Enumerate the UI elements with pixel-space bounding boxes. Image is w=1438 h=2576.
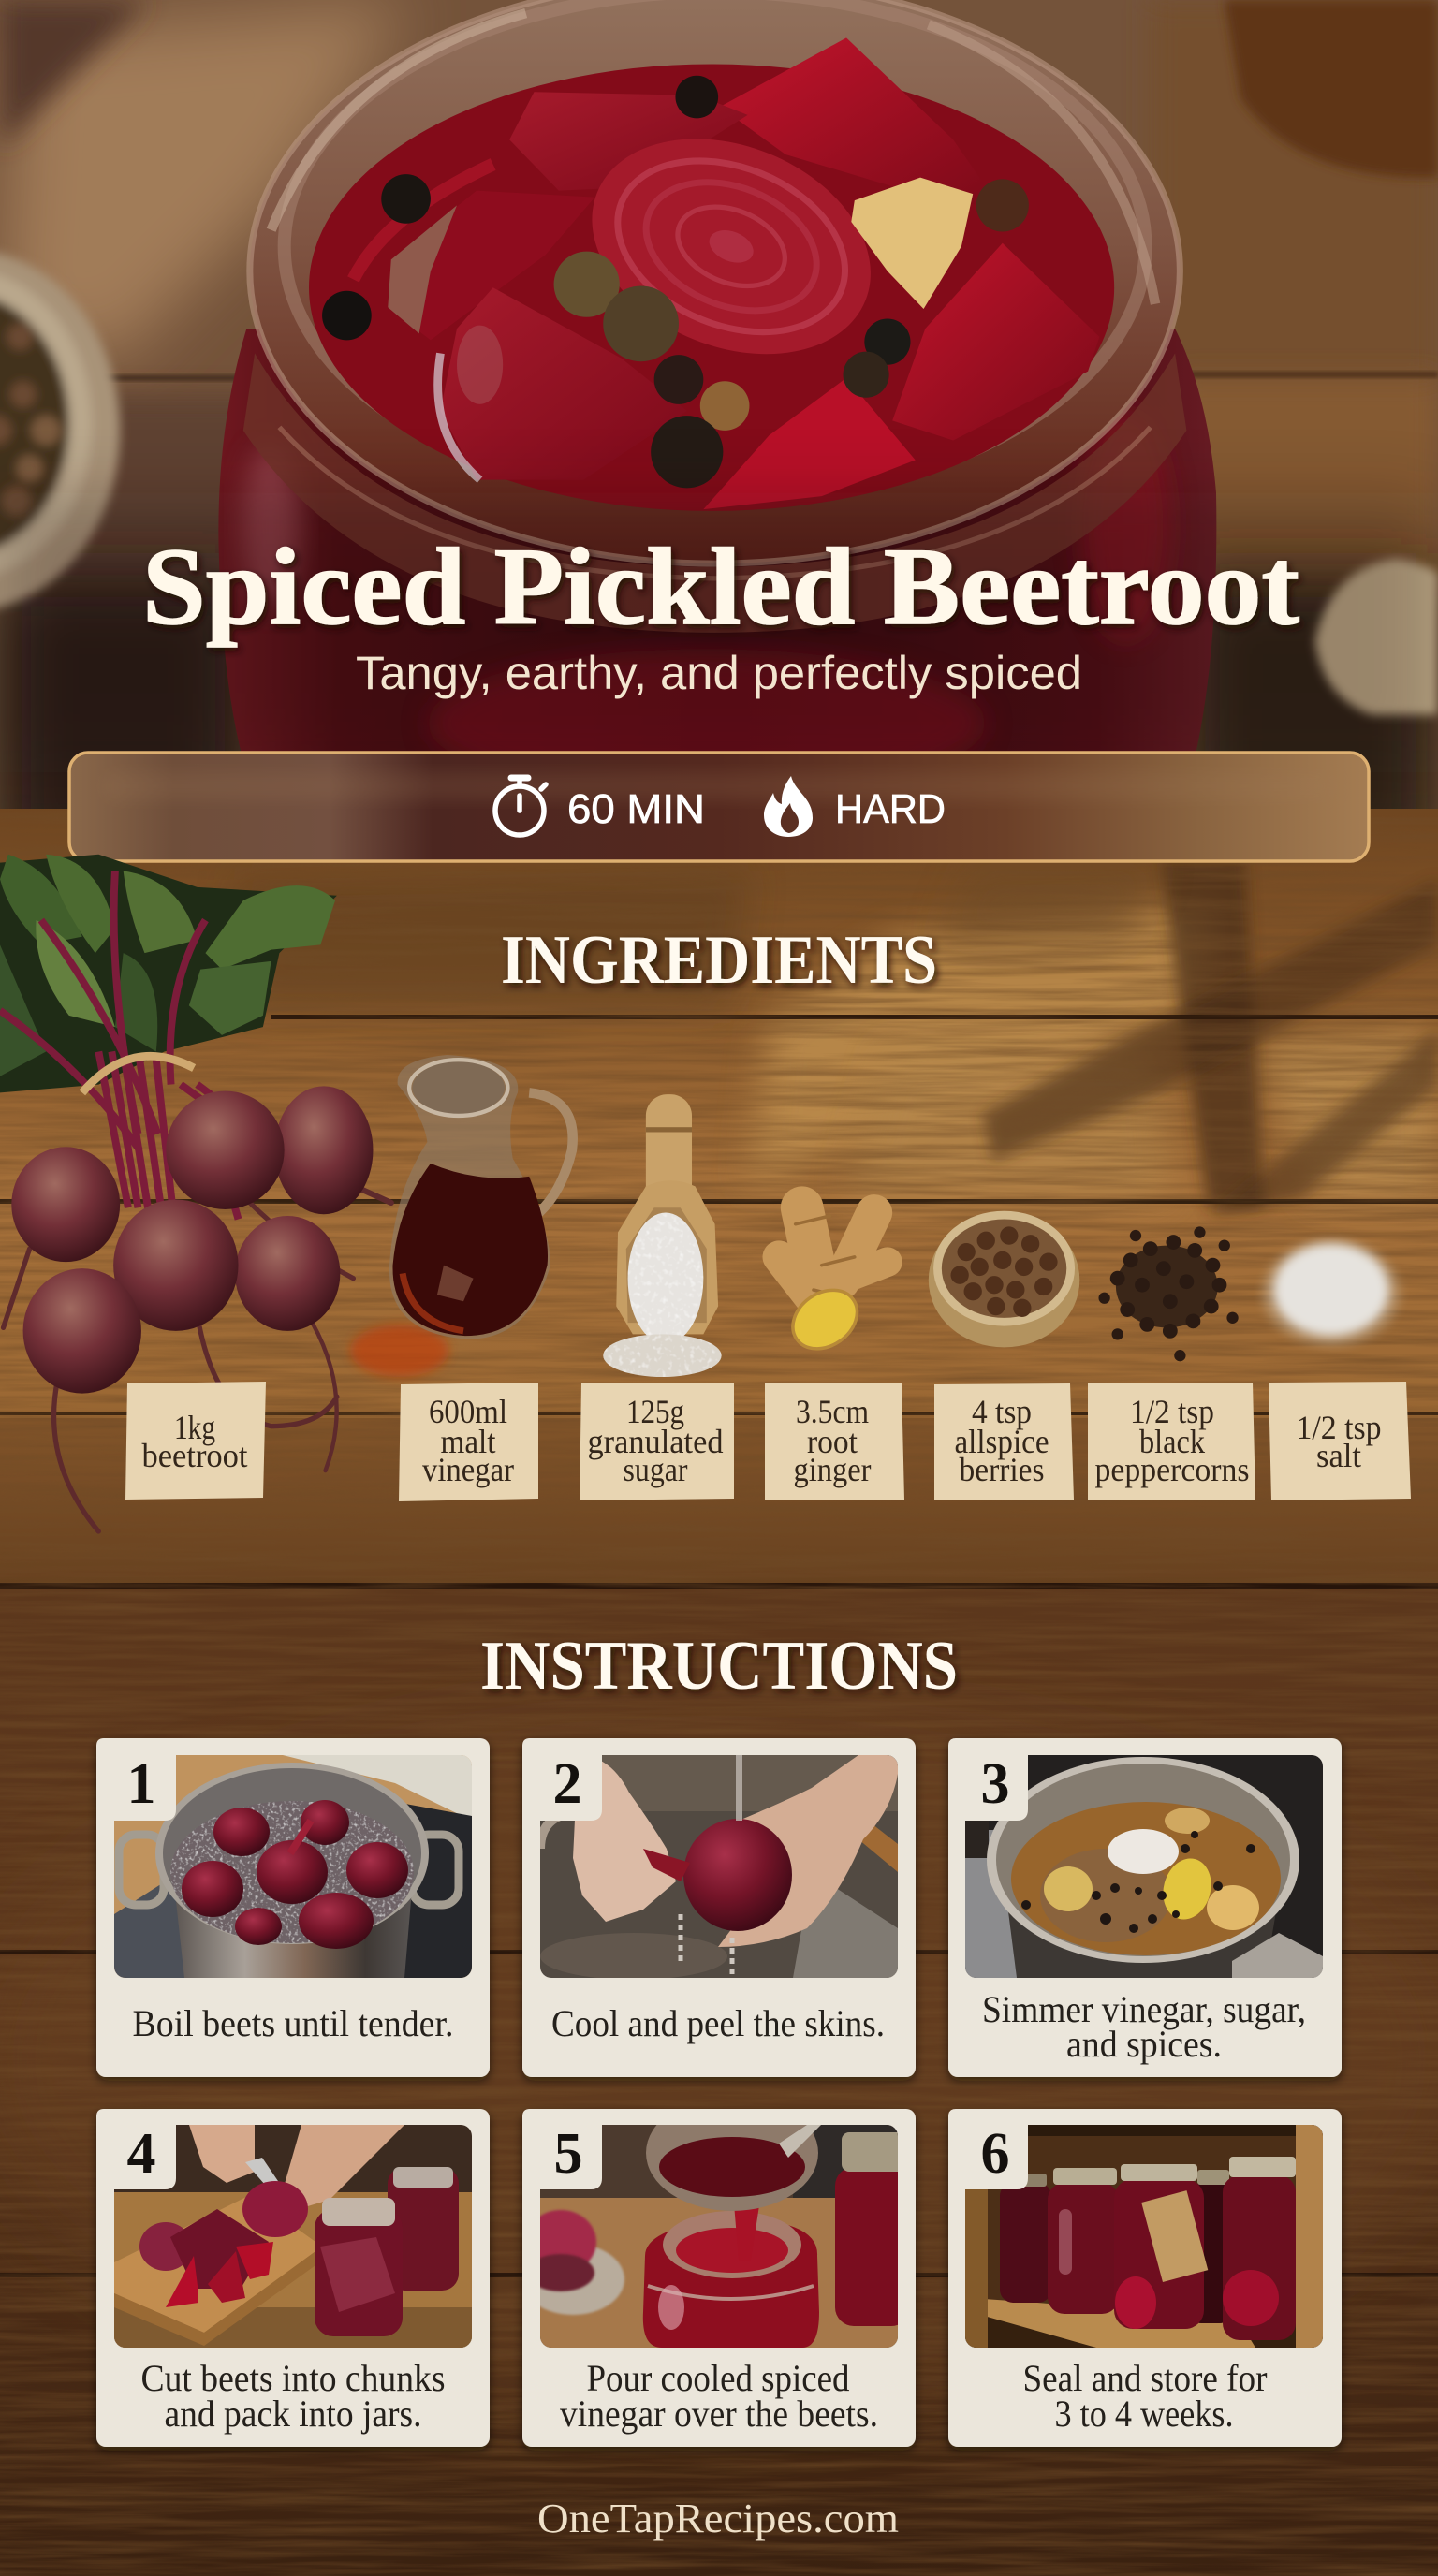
- icon: blurred wooden bowl top right: [1225, 0, 1438, 178]
- label: vinegar: malt: [440, 1423, 496, 1460]
- label: peppercorns: [1088, 1383, 1255, 1500]
- photo: simmering spiced vinegar: [965, 1755, 1323, 1978]
- label: allspice: [934, 1383, 1074, 1500]
- beet chunk top right: [723, 37, 961, 187]
- wood grain texture: [0, 805, 1438, 2576]
- background: middle wood planks with light shafts: [0, 805, 1438, 1589]
- photo: boiling beets: [114, 1755, 472, 1978]
- illustration: beetroot bunch: [0, 855, 391, 1531]
- label: ginger: ginger: [794, 1451, 872, 1488]
- step card 2: [522, 1738, 916, 2077]
- label: allspice: berries: [959, 1451, 1045, 1488]
- step caption: Pour cooled spiced: [586, 2357, 850, 2399]
- photo: cutting beets and packing jars: [107, 2125, 472, 2348]
- illustration: scoop of sugar: [603, 1094, 722, 1377]
- label: allspice: allspice: [955, 1423, 1049, 1460]
- step number badge: 3: [981, 1752, 1009, 1816]
- roots: [4, 1186, 391, 1531]
- step number badge: [948, 2109, 1028, 2189]
- illustration: ginger root: [779, 1208, 888, 1361]
- step caption: and spices.: [1066, 2023, 1222, 2065]
- jar body: [218, 329, 1216, 772]
- step caption: [982, 1988, 1306, 2065]
- hero photo: pickled beetroot jar on table: [0, 0, 1438, 887]
- step number badge: [948, 1738, 1028, 1821]
- title: Spiced Pickled Beetroot: [142, 525, 1299, 648]
- photo: peeling beet: [540, 1755, 898, 1980]
- step caption: Seal and store for: [1022, 2357, 1268, 2399]
- label: vinegar: [399, 1383, 538, 1501]
- icon: stopwatch: [495, 778, 546, 835]
- step caption: Simmer vinegar, sugar,: [982, 1988, 1306, 2030]
- step number badge: [96, 2109, 176, 2189]
- heading: instructions: INSTRUCTIONS: [480, 1628, 958, 1705]
- step number badge: 5: [554, 2122, 582, 2186]
- beets: [274, 1086, 373, 1214]
- label: sugar: granulated: [588, 1423, 723, 1460]
- stats bar: [69, 753, 1369, 861]
- footer website: OneTapRecipes.com: [537, 2496, 899, 2541]
- label: sugar: [580, 1383, 734, 1500]
- beet chunk right: [892, 243, 1099, 440]
- title shade: [0, 493, 1438, 772]
- step caption: Cool and peel the skins.: [551, 2002, 885, 2044]
- beet slice with rings: [560, 99, 902, 393]
- label: salt: 1/2 tsp: [1296, 1409, 1382, 1446]
- icon: blurred spice bowl left: [0, 250, 120, 611]
- step caption: Boil beets until tender.: [133, 2002, 453, 2044]
- step caption: [140, 2357, 446, 2435]
- label: sugar: sugar: [624, 1451, 688, 1488]
- illustration: salt pile: [1262, 1240, 1401, 1346]
- label: peppercorns: 1/2 tsp: [1130, 1393, 1214, 1430]
- illustration: black peppercorns: [1098, 1226, 1239, 1361]
- pickling liquid: [309, 64, 1114, 511]
- illustration: bowl of allspice: [929, 1211, 1079, 1347]
- label: ginger: [765, 1383, 904, 1500]
- label: salt: salt: [1316, 1437, 1361, 1474]
- step caption: [560, 2357, 878, 2435]
- step caption: 3 to 4 weeks.: [1054, 2393, 1234, 2435]
- beet chunk top left: [509, 92, 748, 191]
- label: vinegar: vinegar: [422, 1451, 514, 1488]
- ingredient illustrations: [0, 855, 1401, 1531]
- step number badge: 2: [552, 1752, 582, 1816]
- glass front rim overlay: [243, 353, 1186, 633]
- label: beetroot: beetroot: [142, 1437, 247, 1474]
- icon: blurred ginger right: [1314, 559, 1438, 715]
- spices in jar: [322, 76, 1029, 488]
- leaves: [0, 855, 337, 1092]
- heading: ingredients: INGREDIENTS: [501, 922, 937, 999]
- step caption: [1022, 2357, 1268, 2435]
- label: allspice: 4 tsp: [972, 1393, 1032, 1430]
- label: salt: [1269, 1382, 1411, 1500]
- label: ginger: root: [807, 1423, 858, 1460]
- subtitle: Tangy, earthy, and perfectly spiced: [356, 647, 1082, 699]
- label: peppercorns: peppercorns: [1095, 1451, 1249, 1488]
- step card 5: [521, 2095, 916, 2447]
- step number badge: [96, 1738, 176, 1821]
- step card 3: [948, 1738, 1342, 2077]
- step number badge: 1: [127, 1752, 155, 1816]
- ginger piece: [851, 178, 973, 309]
- label: beetroot: 1kg: [174, 1409, 215, 1446]
- stat: difficulty: HARD: [835, 786, 946, 832]
- label: sugar: 125g: [626, 1393, 684, 1430]
- step caption: Cut beets into chunks: [140, 2357, 446, 2399]
- step card 1: [96, 1738, 490, 2077]
- step number badge: [522, 2109, 602, 2189]
- step number badge: 6: [981, 2122, 1009, 2186]
- label: vinegar: 600ml: [429, 1393, 507, 1430]
- label: peppercorns: black: [1139, 1423, 1205, 1460]
- step card 6: [948, 2109, 1342, 2447]
- beet chunk lower left: [438, 287, 687, 480]
- ingredient labels: [125, 1382, 1411, 1501]
- illustration: malt vinegar jug: [350, 1055, 573, 1377]
- photo: jars on pantry shelf: [965, 2125, 1323, 2348]
- label: beetroot: [125, 1382, 266, 1500]
- icon: flame: [764, 776, 813, 837]
- beet chunk left: [388, 191, 594, 340]
- stat: time: 60 MIN: [567, 786, 705, 832]
- step caption: vinegar over the beets.: [560, 2393, 878, 2435]
- photo: pouring vinegar into jar: [521, 2095, 910, 2348]
- label: ginger: 3.5cm: [796, 1393, 869, 1430]
- stems: [0, 871, 271, 1220]
- step card 4: [96, 2109, 490, 2447]
- step number badge: 4: [127, 2122, 155, 2186]
- background: lower wood planks: [0, 1582, 1438, 2576]
- hero backdrop: [0, 0, 1438, 887]
- step caption: and pack into jars.: [165, 2393, 421, 2435]
- jar glass rim: [250, 0, 1180, 564]
- step number badge: [522, 1738, 602, 1821]
- beet chunk bottom: [703, 378, 916, 509]
